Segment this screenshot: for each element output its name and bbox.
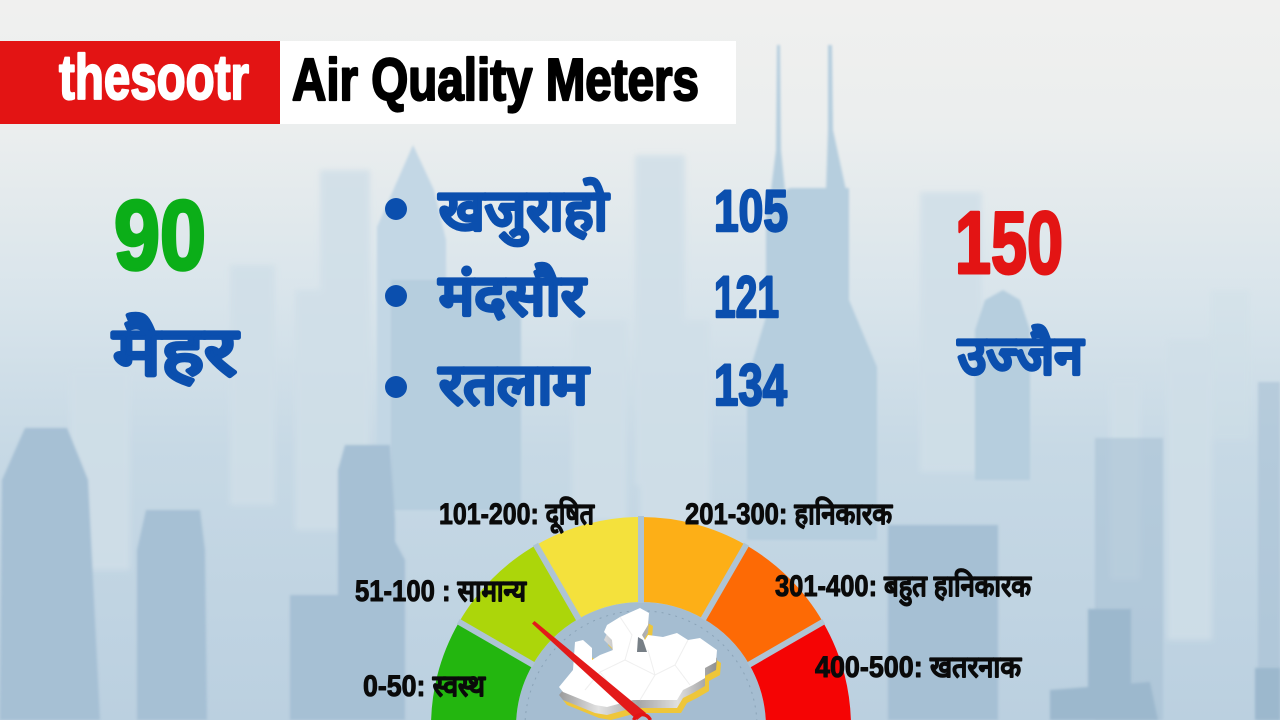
right reading: Ujjain: 150	[955, 193, 1063, 292]
row: Mandsaur: मंदसौर	[438, 263, 588, 328]
segment: harmful	[641, 517, 746, 619]
row: Mandsaur: 121	[714, 265, 779, 330]
segment: very harmful	[704, 545, 823, 664]
city list	[385, 178, 788, 418]
row: Khajuraho: 105	[714, 179, 788, 244]
row: Ratlam: 134	[714, 353, 787, 418]
AQI gauge	[431, 516, 851, 720]
label: 301-400: 301-400: बहुत हानिकारक	[775, 568, 1032, 607]
row: Khajuraho	[385, 178, 788, 247]
gauge labels	[355, 496, 1032, 703]
label: 201-300: 201-300: हानिकारक	[685, 496, 893, 531]
right reading: Ujjain	[955, 193, 1085, 386]
title panel	[280, 41, 736, 124]
row: Ratlam	[385, 353, 787, 418]
header banner	[0, 41, 736, 124]
left reading: Maihar	[111, 180, 240, 390]
segment: healthy	[431, 622, 533, 720]
segment: moderate	[459, 545, 578, 664]
label: 0-50: 0-50: स्वस्थ	[363, 670, 487, 703]
label: 101-200: 101-200: दूषित	[439, 496, 596, 534]
row: Mandsaur	[385, 263, 779, 330]
segment: polluted	[536, 517, 641, 619]
label: 51-100: 51-100 : सामान्य	[355, 575, 527, 608]
brand panel: thesootr	[59, 43, 249, 113]
left reading: Maihar: 90	[114, 180, 206, 290]
needle	[532, 621, 650, 720]
row: Ratlam: रतलाम	[438, 353, 590, 417]
row: Khajuraho: खजुराहो	[438, 178, 610, 247]
map of Madhya Pradesh	[559, 608, 721, 720]
segment: dangerous	[749, 622, 851, 720]
right reading: Ujjain: उज्जैन	[957, 324, 1085, 386]
label: 400-500: 400-500: खतरनाक	[815, 651, 1022, 684]
left reading: Maihar: मैहर	[111, 313, 240, 390]
brand panel	[0, 41, 280, 124]
title panel: Air Quality Meters	[292, 47, 699, 113]
gauge dial centre	[516, 602, 766, 720]
